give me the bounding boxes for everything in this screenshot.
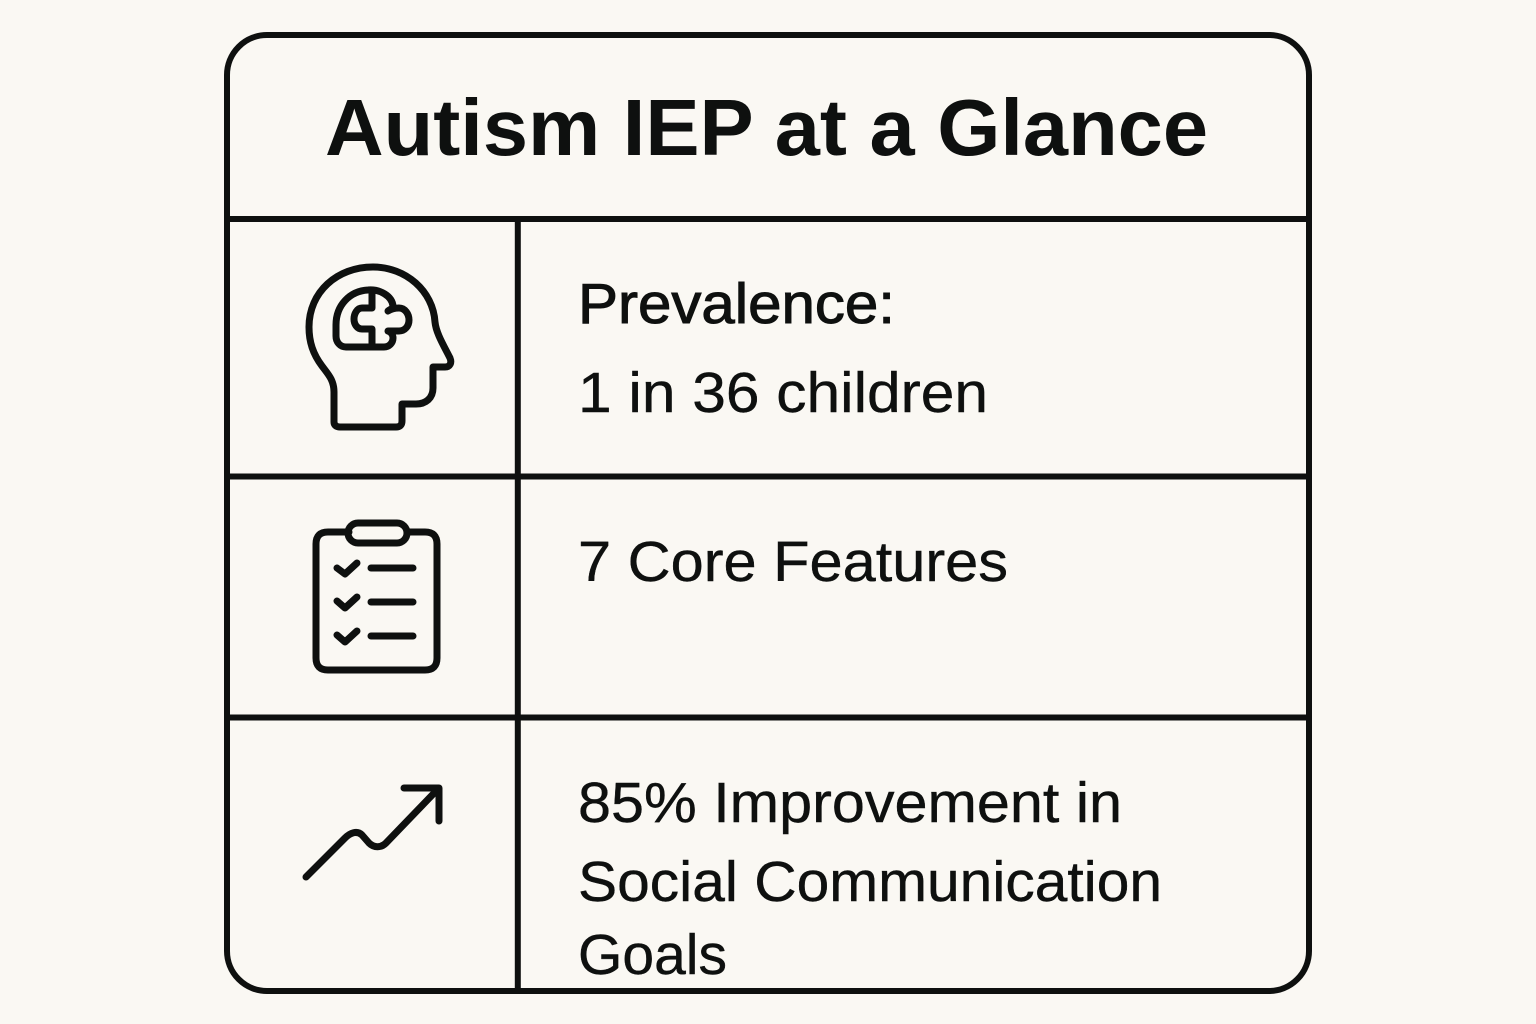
table card [227,35,1309,991]
icon: rising trend arrow [306,788,439,877]
row: improvement [306,771,1162,987]
row: prevalence [309,267,988,427]
text: 85% improvement: 85% Improvement in [578,771,1122,835]
row: core features [316,523,1008,670]
icon: clipboard checklist [316,523,437,670]
text: 85% improvement [578,771,1162,987]
text: 85% improvement: Social Communication [578,850,1162,914]
label: prevalence: Prevalence: [578,272,895,336]
value: 1 in 36 children: 1 in 36 children [578,361,988,425]
text: 7 core features: 7 Core Features [578,530,1008,594]
text: 85% improvement: Goals [578,923,727,987]
icon: head with puzzle brain [309,267,451,427]
title: Autism IEP at a Glance [325,83,1208,172]
